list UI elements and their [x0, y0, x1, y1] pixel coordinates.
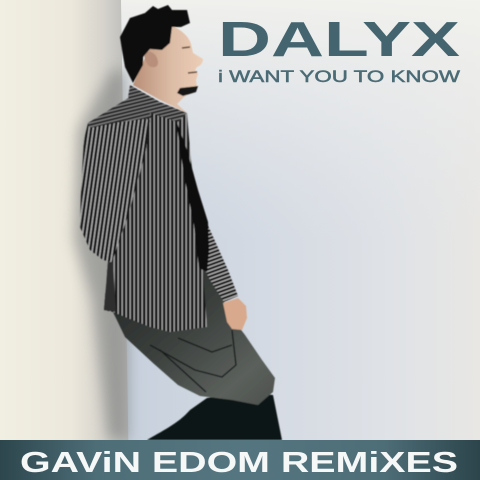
background: left wall	[0, 0, 129, 480]
bottom banner	[0, 440, 480, 480]
black undershirt placket	[176, 120, 209, 272]
neck and face	[133, 26, 203, 113]
shirt side shade	[104, 262, 116, 312]
shirt body	[104, 97, 207, 332]
jeans	[113, 262, 275, 405]
banner text: Gavin Edom Remixes: GAViN EDOM REMiXES	[20, 447, 458, 479]
jeans pocket	[150, 330, 236, 392]
hair	[120, 5, 190, 83]
figure: man leaning on the wall	[80, 5, 282, 440]
beard	[177, 86, 198, 96]
ear	[144, 51, 158, 67]
title: DALYX: DALYX	[218, 13, 460, 67]
wall shadow behind figure	[74, 70, 128, 440]
lower leg	[147, 392, 282, 440]
eye and mouth	[182, 47, 197, 73]
collar	[128, 85, 187, 122]
subtitle: I Want You To Know: i WANT YOU TO KNOW	[218, 68, 461, 86]
back arm sleeve	[80, 112, 150, 262]
shoulder yoke	[88, 97, 152, 128]
hand	[223, 298, 247, 330]
background: right wall	[120, 0, 480, 480]
front sleeve	[201, 215, 238, 302]
